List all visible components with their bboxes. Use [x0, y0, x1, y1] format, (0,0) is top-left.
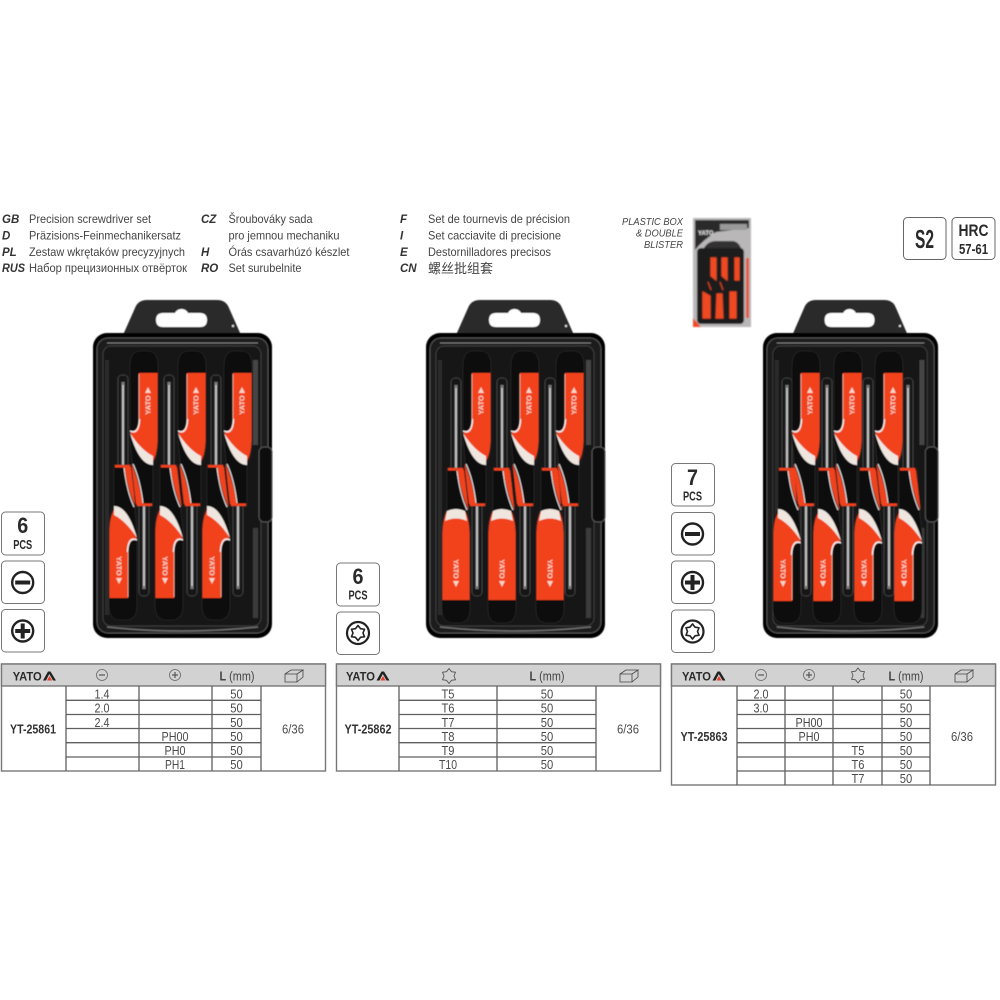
- product photo: YT-25861 set: YATO: [160, 556, 170, 576]
- table: YT-25863: YATO: [682, 670, 711, 684]
- product photo: YT-25861 set: YATO: [114, 556, 124, 576]
- language list: product names: Набор прецизионных отвёрток: [29, 261, 188, 275]
- packaging caption: [622, 216, 684, 251]
- table: YT-25863: 3.0: [754, 700, 768, 716]
- language list: product names: Präzisions-Feinmechanikersatz: [29, 228, 181, 242]
- table: YT-25863: 50: [900, 700, 912, 716]
- badge: HRC hardness: [952, 218, 995, 260]
- table: YT-25862: [336, 664, 660, 772]
- language list: product names: 螺丝批组套: [428, 261, 493, 276]
- table: YT-25862: T10: [439, 757, 457, 772]
- table: YT-25863: T6: [852, 757, 864, 772]
- language list: product names: PL: [2, 247, 17, 259]
- table: YT-25862: T5: [442, 686, 454, 702]
- table: YT-25862: L (mm): [530, 668, 564, 684]
- language list: product names: E: [400, 247, 408, 259]
- table: YT-25863: YT-25863: [680, 729, 728, 744]
- product photo: YT-25862 set: YATO: [476, 395, 486, 415]
- table: YT-25861: 50: [230, 686, 243, 702]
- table: YT-25863: L (mm): [888, 668, 924, 684]
- product photo: YT-25863 set: YATO: [806, 395, 814, 415]
- table: YT-25862: 50: [541, 715, 553, 730]
- table: YT-25862: 50: [541, 757, 553, 772]
- badge: S2 steel: S2: [915, 224, 934, 254]
- icon column: YT-25863: [672, 464, 714, 652]
- table: YT-25863: PH0: [798, 729, 820, 744]
- table: YT-25862: 50: [541, 743, 553, 758]
- language list: product names: RO: [201, 263, 218, 275]
- packaging caption: PLASTIC BOX: [622, 216, 684, 228]
- product photo: YT-25862 set: YATO: [452, 559, 460, 579]
- product photo: YT-25861 set: YATO: [144, 395, 152, 415]
- product photo: YT-25863 set: YATO: [900, 559, 908, 579]
- language list: product names: [2, 211, 570, 276]
- language list: product names: Zestaw wkrętaków precyzyjnych: [29, 245, 185, 259]
- language list: product names: Set surubelnite: [228, 261, 302, 275]
- table: YT-25863: 2.0: [754, 686, 768, 702]
- language list: product names: Set cacciavite di precisione: [428, 228, 561, 242]
- table: YT-25862: 50: [541, 729, 553, 744]
- language list: product names: H: [201, 247, 210, 259]
- table: YT-25861: PH0: [164, 743, 186, 758]
- icon column: YT-25863: PCS: [683, 490, 702, 504]
- table: YT-25863: 50: [900, 686, 912, 702]
- language list: product names: GB: [2, 214, 19, 226]
- product photo: YT-25862 set: YATO: [524, 395, 534, 415]
- table: YT-25861: 50: [230, 700, 243, 716]
- badge: HRC hardness: 57-61: [959, 241, 988, 258]
- language list: product names: Šroubováky sada: [228, 211, 313, 226]
- packaging photo: blister card: [693, 218, 751, 327]
- icon column: YT-25861: PCS: [13, 538, 32, 552]
- packaging caption: BLISTER: [644, 239, 683, 251]
- product photo: YT-25862 set: YATO: [546, 559, 554, 579]
- badge: HRC hardness: HRC: [958, 221, 988, 240]
- table: YT-25861: 50: [230, 743, 243, 758]
- table: YT-25861: 50: [230, 715, 243, 730]
- language list: product names: pro jemnou mechaniku: [228, 228, 340, 242]
- table: YT-25861: 50: [230, 729, 243, 744]
- product photo: YT-25863 set: YATO: [860, 559, 868, 579]
- language list: product names: Set de tournevis de précision: [428, 212, 570, 226]
- table: YT-25863: T7: [852, 771, 864, 786]
- table: YT-25861: [2, 664, 326, 772]
- table: YT-25863: 50: [900, 715, 912, 730]
- table: YT-25861: L (mm): [220, 668, 254, 684]
- icon column: YT-25862: PCS: [348, 588, 368, 602]
- table: YT-25861: 6/36: [282, 722, 304, 736]
- icon column: YT-25863: 7: [687, 465, 698, 490]
- table: YT-25863: 50: [900, 729, 912, 744]
- language list: product names: Órás csavarhúzó készlet: [228, 244, 350, 259]
- product photo: YT-25862 set: YATO: [570, 395, 578, 415]
- product photo: YT-25862 set: [426, 300, 605, 638]
- language list: product names: I: [400, 230, 404, 242]
- product photo: YT-25863 set: [763, 300, 938, 638]
- language list: product names: Precision screwdriver set: [29, 212, 152, 226]
- language list: product names: F: [400, 214, 408, 226]
- product photo: YT-25863 set: YATO: [818, 559, 828, 579]
- table: YT-25863: PH00: [796, 715, 822, 730]
- product photo: YT-25861 set: YATO: [208, 556, 216, 576]
- table: YT-25862: 6/36: [617, 722, 639, 736]
- icon column: YT-25862: [336, 563, 380, 654]
- icon column: YT-25861: [2, 512, 44, 652]
- language list: product names: Destornilladores precisos: [428, 245, 551, 259]
- table: YT-25862: 50: [541, 700, 553, 716]
- product photo: YT-25863 set: YATO: [888, 395, 898, 415]
- product photo: YT-25861 set: YATO: [192, 395, 200, 415]
- table: YT-25861: 2.4: [94, 715, 110, 730]
- table: YT-25861: 2.0: [94, 700, 110, 716]
- table: YT-25861: PH1: [165, 757, 185, 772]
- table: YT-25862: T6: [442, 700, 454, 716]
- table: YT-25863: 50: [900, 771, 912, 786]
- packaging photo: blister card: YATO: [698, 231, 714, 237]
- table: YT-25861: YT-25861: [10, 722, 56, 737]
- table: YT-25863: 6/36: [951, 729, 973, 744]
- product photo: YT-25862 set: YATO: [498, 559, 506, 579]
- table: YT-25862: YT-25862: [344, 722, 392, 736]
- table: YT-25862: 50: [541, 686, 553, 702]
- packaging caption: & DOUBLE: [636, 228, 684, 240]
- table: YT-25861: 1.4: [94, 686, 110, 702]
- language list: product names: CZ: [201, 214, 217, 226]
- product photo: YT-25863 set: YATO: [778, 559, 788, 579]
- product photo: YT-25863 set: YATO: [848, 395, 856, 415]
- table: YT-25862: T7: [442, 715, 454, 730]
- table: YT-25861: 50: [230, 757, 243, 772]
- table: YT-25862: T8: [442, 729, 454, 744]
- language list: product names: RUS: [2, 263, 25, 275]
- icon column: YT-25861: 6: [17, 513, 28, 538]
- table: YT-25861: YATO: [13, 670, 42, 684]
- product photo: YT-25861 set: YATO: [238, 395, 246, 415]
- table: YT-25861: PH00: [162, 729, 188, 744]
- table: YT-25863: 50: [900, 757, 912, 772]
- badge: S2 steel: [904, 218, 946, 260]
- language list: product names: CN: [400, 263, 417, 275]
- table: YT-25863: [672, 664, 996, 786]
- icon column: YT-25862: 6: [352, 564, 364, 589]
- language list: product names: D: [2, 230, 10, 242]
- table: YT-25862: T9: [442, 743, 454, 758]
- product photo: YT-25861 set: [93, 300, 272, 638]
- table: YT-25863: T5: [852, 743, 864, 758]
- table: YT-25863: 50: [900, 743, 912, 758]
- table: YT-25862: YATO: [346, 670, 375, 684]
